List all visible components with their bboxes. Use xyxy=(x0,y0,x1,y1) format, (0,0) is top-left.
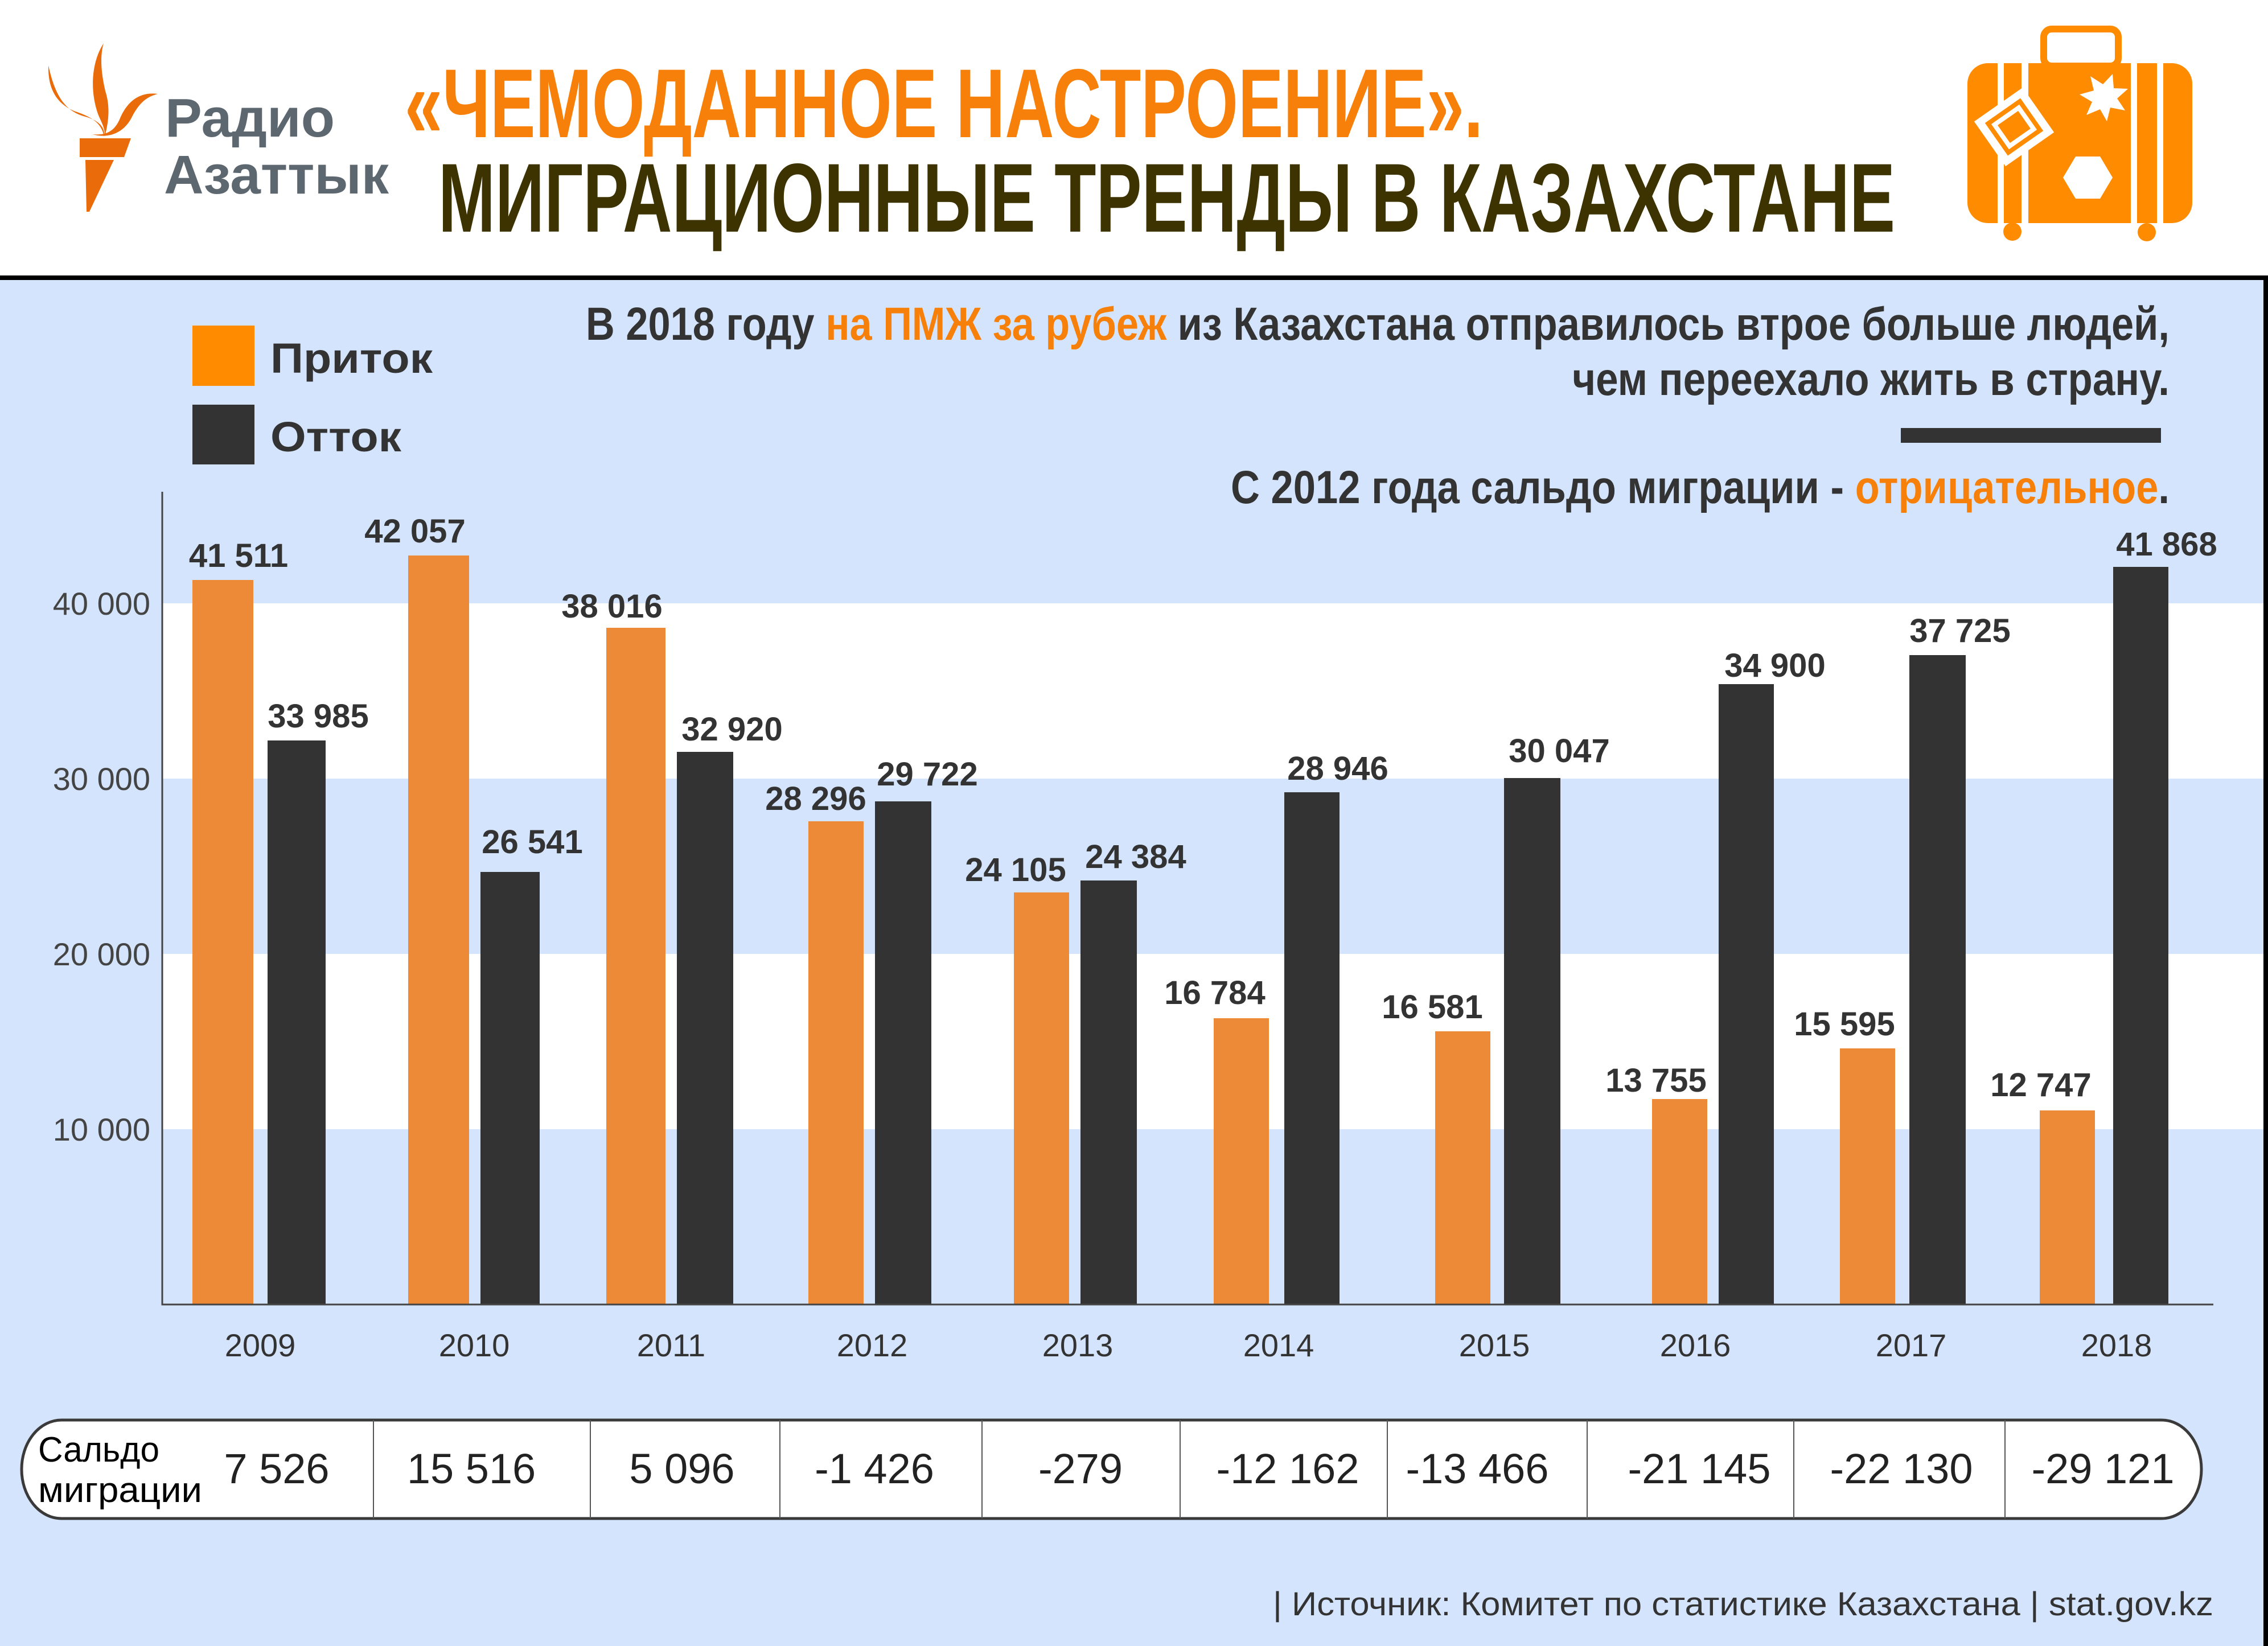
year labels: 2012 xyxy=(837,1327,907,1363)
table: migration balance: -13 466 xyxy=(1406,1445,1548,1492)
year labels: 2011 xyxy=(637,1327,705,1363)
text block: headline facts: С 2012 года сальдо миграции - отрицательное. xyxy=(1231,462,2170,513)
axes xyxy=(162,492,2213,1305)
text: logo wordmark xyxy=(164,88,389,205)
table: migration balance: миграции xyxy=(38,1471,202,1510)
bar value labels: 38 016 xyxy=(561,588,663,625)
year labels: 2017 xyxy=(1876,1327,1946,1363)
table: migration balance: -21 145 xyxy=(1628,1445,1770,1492)
bar value labels: 24 105 xyxy=(965,851,1066,888)
year labels: 2009 xyxy=(225,1327,295,1363)
bar value labels: 37 725 xyxy=(1909,612,2011,649)
year labels: 2013 xyxy=(1042,1327,1113,1363)
source note: | Источник: Комитет по статистике Казахстана | stat.gov.kz xyxy=(1273,1586,2213,1623)
bar value labels: 42 057 xyxy=(364,513,466,550)
bar value labels: 34 900 xyxy=(1724,647,1826,684)
bar value labels: 32 920 xyxy=(681,711,783,748)
bar value labels: 28 296 xyxy=(765,780,866,817)
year labels: 2016 xyxy=(1660,1327,1731,1363)
text block: headline facts: чем переехало жить в страну. xyxy=(1572,353,2170,405)
table: migration balance: 5 096 xyxy=(629,1445,735,1492)
legend: Приток xyxy=(270,335,433,382)
bar chart xyxy=(162,492,2217,1363)
table: migration balance: -1 426 xyxy=(815,1445,934,1492)
bar value labels: 41 511 xyxy=(189,537,288,574)
bar value labels: 28 946 xyxy=(1287,750,1388,787)
bar value labels: 26 541 xyxy=(482,824,583,861)
bar value labels: 24 384 xyxy=(1085,838,1186,875)
bar value labels: 16 581 xyxy=(1382,989,1483,1026)
text block: headline facts xyxy=(586,298,2170,513)
bar value labels xyxy=(189,513,2217,1104)
legend xyxy=(192,326,433,464)
year labels xyxy=(225,1327,2152,1363)
table: migration balance: -29 121 xyxy=(2032,1445,2174,1492)
table: migration balance: 7 526 xyxy=(224,1445,330,1492)
bar value labels: 41 868 xyxy=(2116,526,2217,563)
y axis labels: 40 000 xyxy=(53,586,150,622)
year labels: 2018 xyxy=(2081,1327,2152,1363)
title xyxy=(405,49,1895,253)
bar value labels: 30 047 xyxy=(1509,733,1610,769)
table: migration balance: Сальдо xyxy=(38,1430,159,1470)
title: «ЧЕМОДАННОЕ НАСТРОЕНИЕ». xyxy=(405,49,1483,158)
logo: Radio Azattyk xyxy=(48,43,389,212)
bar value labels: 15 595 xyxy=(1794,1006,1895,1043)
icon: torch xyxy=(48,43,158,212)
table: migration balance: -22 130 xyxy=(1830,1445,1973,1492)
y axis labels: 30 000 xyxy=(53,761,150,797)
bar value labels: 13 755 xyxy=(1605,1062,1707,1099)
y axis labels: 20 000 xyxy=(53,936,150,972)
icon: suitcase xyxy=(1967,29,2192,241)
year labels: 2010 xyxy=(439,1327,510,1363)
y axis labels: 10 000 xyxy=(53,1112,150,1147)
year labels: 2015 xyxy=(1459,1327,1530,1363)
bar value labels: 33 985 xyxy=(268,698,369,735)
y axis labels xyxy=(53,586,150,1147)
year labels: 2014 xyxy=(1243,1327,1314,1363)
legend: Отток xyxy=(270,413,402,460)
table: migration balance: 15 516 xyxy=(407,1445,536,1492)
bar value labels: 29 722 xyxy=(877,756,978,793)
bar value labels: 16 784 xyxy=(1164,974,1266,1011)
text: logo wordmark: Радио xyxy=(165,88,335,149)
bar value labels: 12 747 xyxy=(1990,1067,2092,1104)
table: migration balance xyxy=(22,1420,2201,1519)
text: logo wordmark: Азаттык xyxy=(164,145,389,205)
table: migration balance: -279 xyxy=(1038,1445,1123,1492)
table: migration balance: -12 162 xyxy=(1217,1445,1359,1492)
